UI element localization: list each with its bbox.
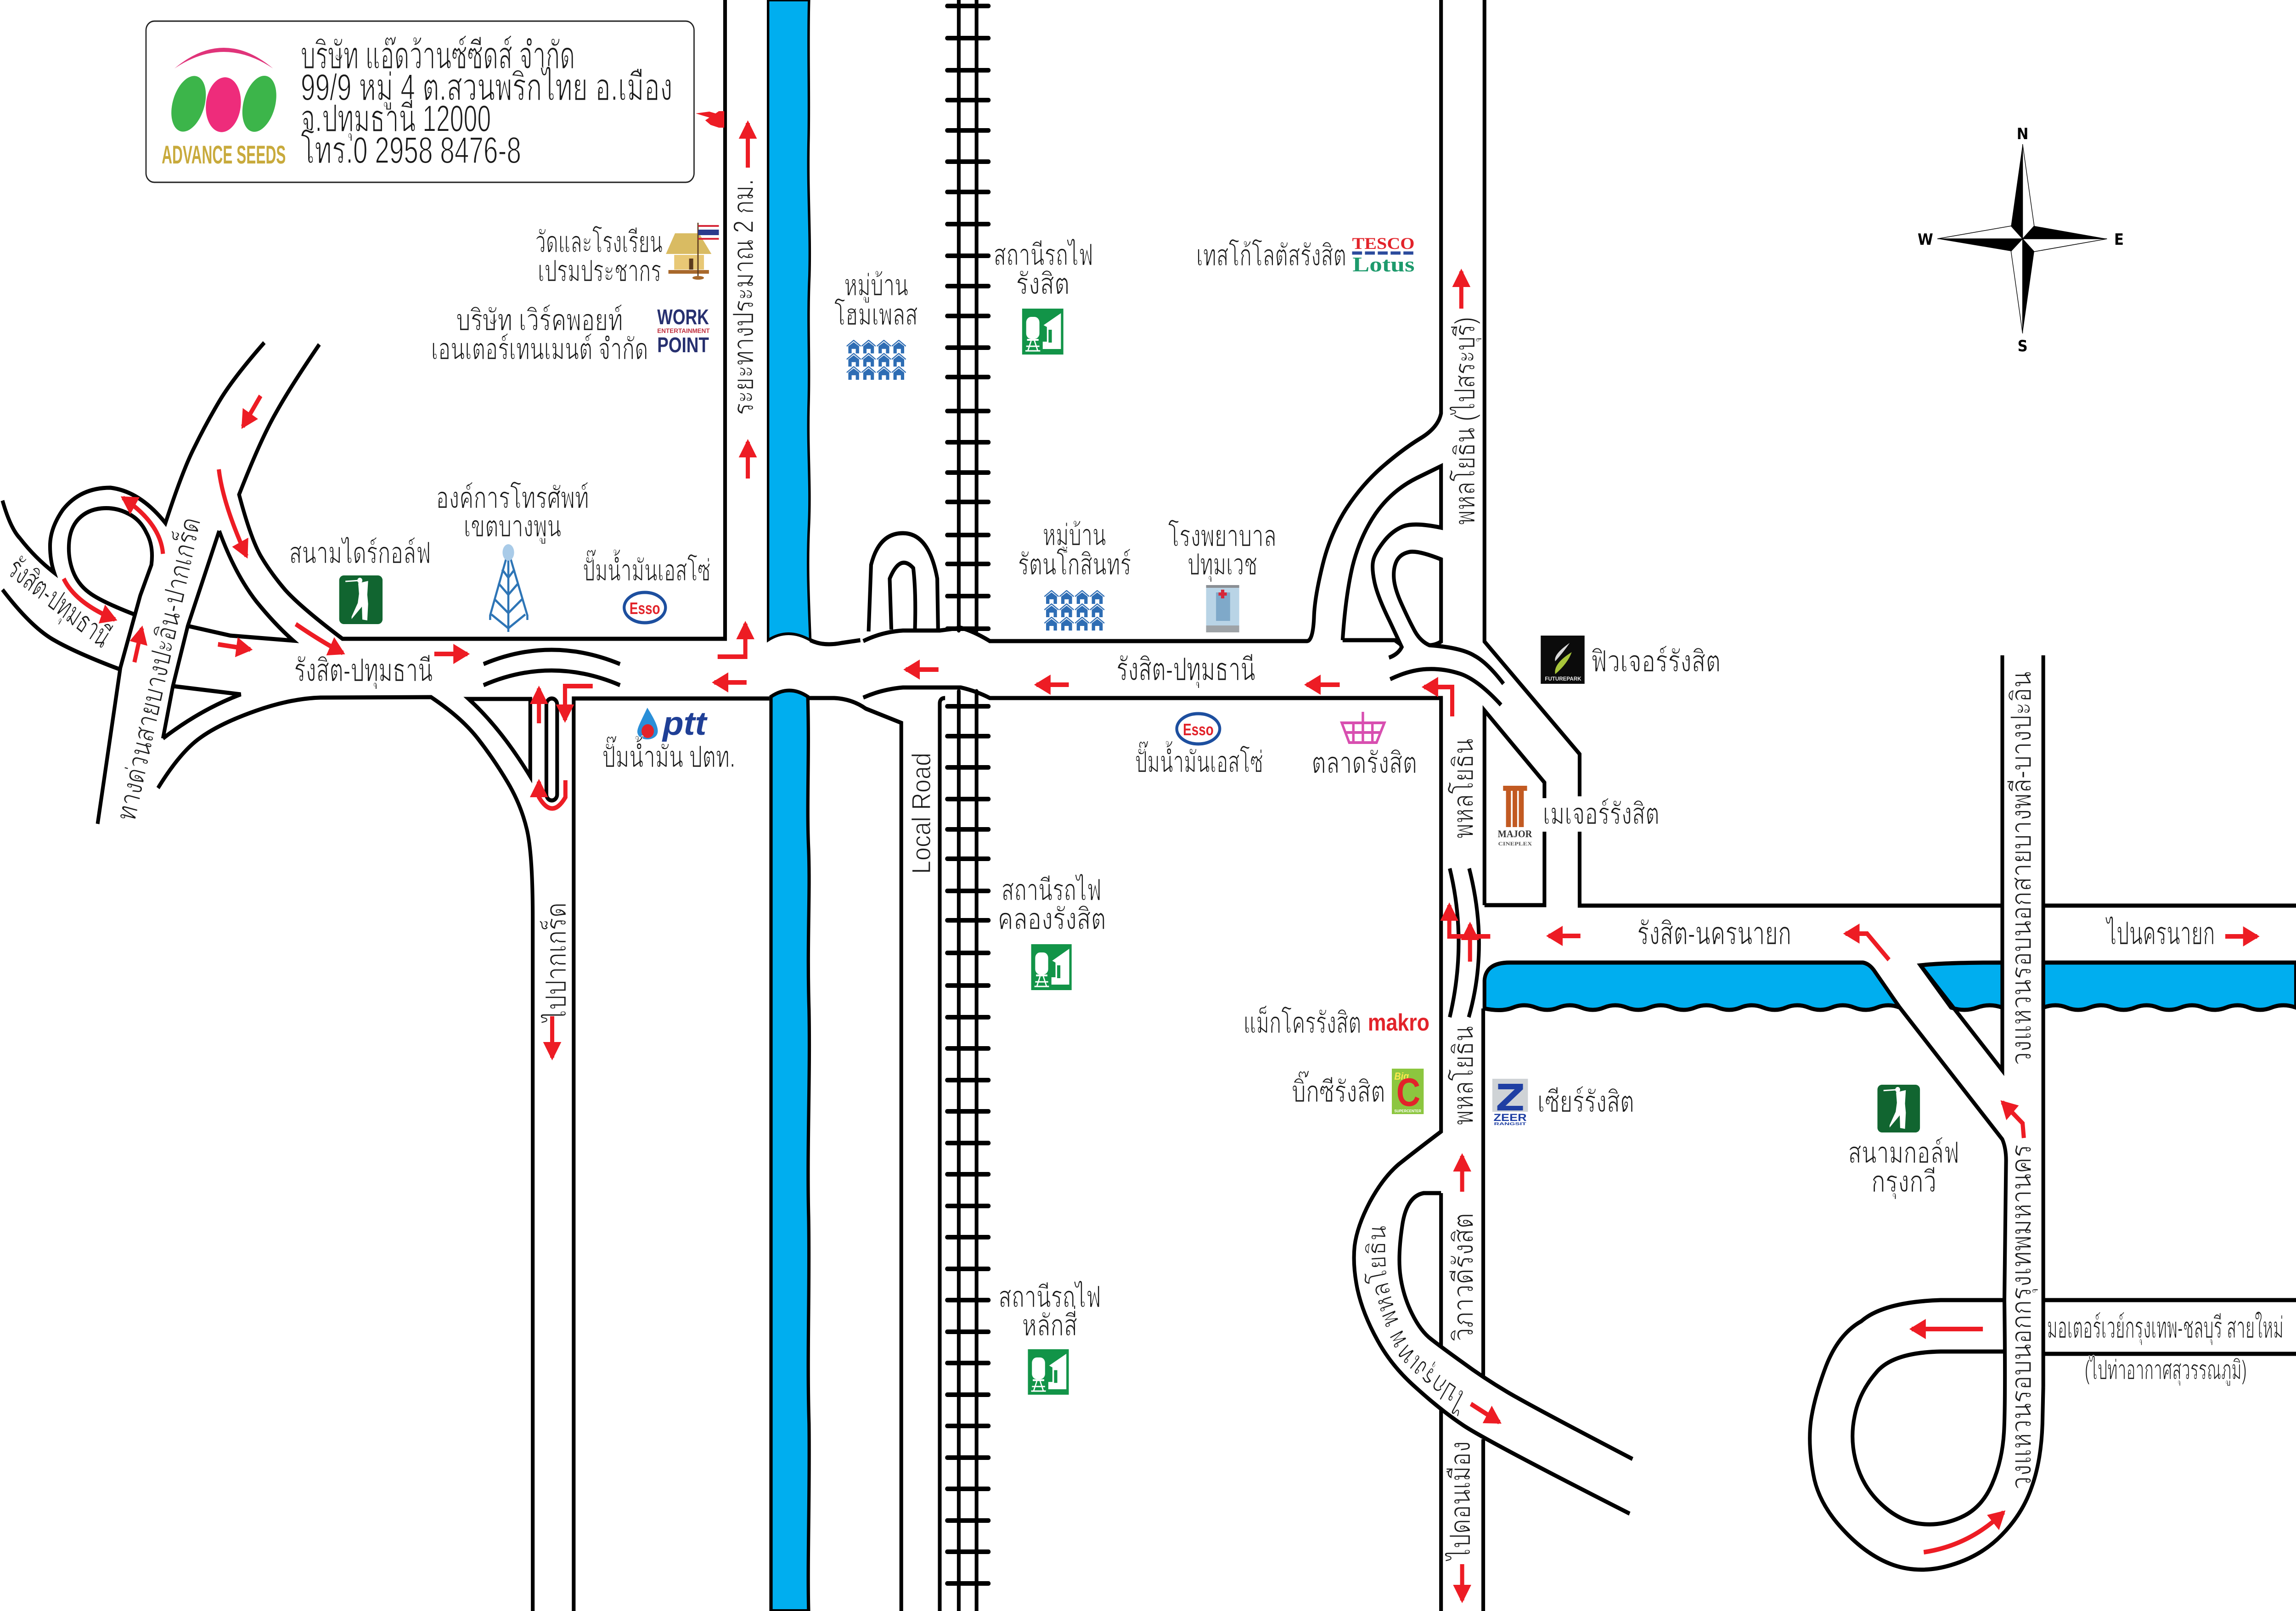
arrow: to Nakhon Nayok [2225, 934, 2257, 939]
arrow: north branch south [243, 396, 260, 427]
landmark: Krungkavee golf [1848, 1085, 1959, 1200]
label: Workpoint line 2: เอนเตอร์เทนเมนต์ จำกัด [431, 332, 648, 366]
logo: makro: makro [1368, 1009, 1429, 1036]
label: Rangsit-Nakhon Nayok: รังสิต-นครนายก [1637, 916, 1791, 951]
road: Pak Kret east edge [574, 698, 769, 1611]
landmark: Makro [1244, 1006, 1429, 1039]
label: Rangsit-Pathum Thani centre: รังสิต-ปทุมธานี [1116, 652, 1255, 689]
landmark: Esso north [583, 549, 710, 623]
phone: โทร.0 2958 8476-8 [301, 129, 521, 171]
landmark: Future Park [1541, 636, 1721, 684]
road: Phahonyothin north east edge and Future Park diagonal [1485, 0, 1580, 796]
icon: tower [490, 544, 527, 632]
arrow: main road west 1 [906, 667, 939, 672]
road: Vibhavadi east edge [1481, 1008, 1486, 1378]
road: rail side road [940, 698, 945, 1611]
label: temple line 1: วัดและโรงเรียน [535, 225, 663, 259]
road: ring road west edge north [1920, 655, 2002, 1070]
road: lower main road near canal [808, 698, 901, 1611]
label: Tesco: เทสโก้โลตัสรังสิต [1196, 239, 1346, 272]
logo: TESCO: TESCO [1352, 234, 1415, 253]
arrow: Phahonyothin north [1468, 924, 1472, 962]
arrow: median U-turn [539, 780, 565, 808]
label: golf 2: กรุงกวี [1871, 1165, 1936, 1200]
road: overpass curves at Rangsit-Nakhon Nayok [1450, 868, 1458, 1017]
arrow: junction elbow [1424, 687, 1452, 716]
arrow: west road east [218, 644, 250, 649]
icon: temple [666, 223, 719, 280]
label: distance along soi: ระยะทางประมาณ 2 กม. [727, 179, 759, 415]
road: motorway south edge [2043, 1352, 2296, 1356]
landmark: telephone organization [436, 481, 589, 632]
road: U-turn outer [869, 533, 938, 631]
compass: black points [1937, 144, 2107, 333]
icon: PTT flame [642, 724, 654, 738]
railway: lower section [947, 691, 989, 1611]
road: upper traffic island [188, 531, 293, 641]
icon: train [1022, 309, 1064, 355]
landmark: Zeer Rangsit [1492, 1079, 1634, 1126]
landmark: Major Cineplex [1498, 786, 1660, 847]
label: Phahonyothin to Saraburi: พหลโยธิน (ไปสระบุรี) [1449, 317, 1482, 525]
icon: location pointer hand [696, 111, 724, 128]
icon: golfer [1877, 1085, 1920, 1132]
arrow: to Pak Kret [550, 1016, 554, 1058]
icon: train [1031, 944, 1072, 990]
canal: horizontal between ramps [1920, 963, 2002, 1010]
compass: N: N [2017, 124, 2028, 143]
icon: Big C: C [1396, 1070, 1420, 1115]
label: ring road south section: วงแหวนรอบนอกกรุงเทพมหานคร [2005, 1144, 2039, 1490]
arrow: loop bottom [64, 579, 115, 620]
arrow: expressway north [135, 628, 142, 662]
label: market: ตลาดรังสิต [1311, 746, 1417, 779]
arrow: Vibhavadi north [1460, 1156, 1464, 1192]
arrow: main road west near soi [715, 680, 747, 685]
logo: center seed [203, 75, 244, 135]
landmark: Esso south [1135, 714, 1263, 778]
label: to Don Mueang: ไปดอนเมือง [1444, 1441, 1476, 1562]
logo: ptt: ptt [662, 705, 708, 742]
road: flyover arc upper [1429, 645, 1503, 684]
canal: horizontal west of interchange [1485, 963, 1900, 1010]
icon: Major: MAJOR [1498, 828, 1532, 839]
road: north branch west edge and cloverleaf [2, 343, 264, 573]
label: station 2: คลองรังสิต [998, 902, 1106, 935]
icon: Future Park [1541, 636, 1585, 684]
info box frame [146, 21, 694, 182]
label: ring road north section: วงแหวนรอบนอกสายบางพลี-บางปะอิน [2005, 671, 2037, 1065]
label: Rattanakosin 1: หมู่บ้าน [1043, 518, 1106, 553]
label: Makro: แม็กโครรังสิต [1244, 1006, 1361, 1039]
landmark: Rangsit market [1311, 712, 1417, 779]
road: Major block lower [1485, 832, 1544, 905]
label: hospital 1: โรงพยาบาล [1168, 519, 1277, 552]
road: interchange inner island [1394, 552, 1441, 645]
label: curved Phahonyothin ramp: ไปกรุงเทพ พหลโยธิน [1362, 1224, 1472, 1418]
icon: Esso oval [1177, 714, 1220, 744]
logo: right seed [236, 71, 282, 137]
arrow: elbow onto flyover [1449, 905, 1490, 936]
label: driving range: สนามไดร์กอล์ฟ [289, 536, 431, 569]
road: diagonal ramp west edge [1900, 1008, 2006, 1300]
icon: Big C: SUPERCENTER [1394, 1109, 1421, 1113]
road: Nakhon Nayok north edge [2043, 904, 2296, 907]
arrow: median elbow [565, 686, 593, 720]
road: north branch east edge to main road [239, 0, 725, 639]
arrow: to Don Mueang [1460, 1564, 1464, 1600]
label: Home Place 2: โฮมเพลส [834, 298, 918, 331]
road: main road south edge and Phahonyothin west edge [863, 687, 1630, 1514]
arrow: main road west 3 [1306, 682, 1339, 687]
canal: horizontal east [2043, 963, 2296, 1010]
label: Vibhavadi Rangsit: วิภาวดีรังสิต [1447, 1213, 1479, 1341]
arrow: main road west 2 [1036, 682, 1069, 687]
icon: PTT drop [637, 708, 658, 739]
label: west Rangsit-Pathum Thani: รังสิต-ปทุมธานี [1, 550, 117, 656]
road: overpass curve east [1469, 868, 1479, 1017]
landmark: Home Place village [834, 269, 918, 380]
icon: Esso wordmark: Esso [1183, 721, 1214, 739]
landmark: Big C [1292, 1069, 1424, 1115]
road: motorway north edge [2043, 1298, 2296, 1302]
label: TOT line 2: เขตบางพูน [464, 510, 561, 544]
logo: ENTERTAINMENT: ENTERTAINMENT [657, 327, 710, 334]
road: expressway east edge [163, 531, 219, 738]
label: station 2: หลักสี่ [1022, 1305, 1077, 1342]
icon: Zeer: ZEER [1494, 1112, 1527, 1123]
road: Vibhavadi west edge [1439, 1193, 1443, 1347]
label: PTT: ปั๊มน้ำมัน ปตท. [602, 736, 736, 773]
landmark: Rattanakosin village [1018, 518, 1131, 631]
compass: S: S [2018, 337, 2028, 355]
arrow: merge curve [296, 624, 343, 653]
label: Rangsit-Pathum Thani west: รังสิต-ปทุมธานี [294, 653, 433, 690]
road: Don Mueang east edge [1481, 1439, 1486, 1611]
compass: E: E [2114, 230, 2124, 248]
road: junction island [469, 699, 530, 777]
icon: train [1028, 1349, 1069, 1395]
label: Esso: ปั๊มน้ำมันเอสโซ่ [583, 549, 710, 587]
logo: WORK: WORK [657, 305, 709, 329]
arrow: main road east [434, 652, 467, 656]
landmark: Tesco Lotus [1196, 234, 1415, 276]
label: Major: เมเจอร์รังสิต [1543, 797, 1660, 830]
landmark: temple and school [535, 223, 719, 287]
road: interchange ramp base [1343, 640, 1401, 644]
road: Major block upper [1485, 710, 1544, 905]
icon: Major: CINEPLEX [1498, 841, 1532, 847]
road: lower interchange inner curve [1399, 1193, 1632, 1459]
icon: Esso oval [624, 592, 665, 623]
label: Zeer: เซียร์รังสิต [1537, 1085, 1634, 1118]
landmark: PTT [602, 705, 736, 773]
landmark: Khlong Rangsit station [998, 873, 1106, 990]
road: lower traffic island [163, 686, 241, 738]
arrow: loop curve [1924, 1512, 2003, 1552]
compass: white points [1937, 144, 2107, 333]
logo: dashes [1352, 252, 1415, 254]
label: station 1: สถานีรถไฟ [994, 238, 1093, 271]
label: Home Place 1: หมู่บ้าน [844, 269, 908, 303]
icon: hospital [1206, 585, 1239, 632]
road: flyover arc lower [1390, 669, 1501, 705]
label: Phahonyothin lower interchange: พหลโยธิน [1447, 738, 1479, 839]
road: narrow median [546, 698, 557, 800]
road: main road north edge east of canal [810, 640, 861, 644]
road: loop inner [1852, 1300, 2005, 1524]
arrow: motorway loop west [1912, 1327, 1983, 1331]
icon: Major [1498, 786, 1532, 847]
arrow: loop top [123, 498, 163, 554]
icon: houses [1044, 591, 1104, 631]
company name: บริษัท แอ๊ดว้านซ์ซีดส์ จำกัด [301, 34, 575, 77]
label: Phahonyothin mid: พหลโยธิน [1447, 1026, 1479, 1125]
road: U-turn inner [889, 563, 915, 631]
road: interchange quarter ramp [1343, 466, 1441, 658]
arrow: ramp south-east [1471, 1404, 1499, 1422]
road: ring road east edge [2041, 655, 2045, 1387]
landmark: Rangsit station [994, 238, 1093, 355]
label: station 2: รังสิต [1016, 267, 1069, 300]
label: to Pak Kret: ไปปากเกร็ด [540, 902, 572, 1024]
label: TOT line 1: องค์การโทรศัพท์ [436, 481, 589, 514]
road: main road north edge to Phahonyothin [863, 0, 1441, 641]
arrow: north branch curve [219, 469, 247, 556]
logo: Lotus: Lotus [1352, 253, 1415, 276]
panel: company info box [146, 21, 694, 182]
label: Workpoint line 1: บริษัท เวิร์คพอยท์ [456, 304, 623, 337]
road: loop outer [1810, 1300, 2043, 1570]
label: Big C: บิ๊กซีรังสิต [1292, 1070, 1385, 1108]
label: Future Park: ฟิวเจอร์รังสิต [1591, 645, 1721, 678]
road: overpass arc upper [484, 650, 620, 664]
label: Local Road: Local Road [906, 753, 936, 874]
label: golf 1: สนามกอล์ฟ [1848, 1136, 1959, 1169]
logo: POINT: POINT [657, 333, 709, 357]
icon: basket [1342, 712, 1384, 743]
label: Rattanakosin 2: รัตนโกสินทร์ [1018, 548, 1131, 581]
road: Don Mueang west edge [1439, 1410, 1443, 1611]
arrow: turn into soi [718, 624, 745, 657]
road: teardrop loop and expressway [69, 508, 152, 824]
road: east edge to ring road [1580, 832, 2002, 906]
address line 1: 99/9 หมู่ 4 ต.สวนพริกไทย อ.เมือง [301, 66, 673, 110]
landmark: driving range [289, 536, 431, 624]
logo: left seed [165, 71, 212, 137]
logo wordmark: ADVANCE SEEDS [162, 141, 286, 169]
canal: upper vertical [768, 0, 810, 640]
compass rose [1918, 124, 2124, 355]
icon: Zeer [1492, 1079, 1528, 1126]
arrow: north on soi [746, 123, 750, 168]
address line 2: จ.ปทุมธานี 12000 [301, 97, 491, 141]
landmark: Pathumwej hospital [1168, 519, 1277, 632]
arrow: ring road ramp [2002, 1102, 2024, 1138]
landmark: Lak Si station [998, 1280, 1101, 1395]
compass: W: W [1918, 230, 1933, 248]
label: Esso: ปั๊มน้ำมันเอสโซ่ [1135, 741, 1263, 778]
label: hospital 2: ปทุมเวช [1187, 548, 1257, 582]
icon: Esso wordmark: Esso [630, 599, 660, 618]
railway: upper section [947, 0, 989, 631]
label: station 1: สถานีรถไฟ [998, 1280, 1101, 1313]
label: expressway: ทางด่วนสายบางปะอิน-ปากเกร็ด [109, 513, 207, 824]
arrow: north on soi lower [746, 442, 750, 479]
road: south curve to Pak Kret [158, 697, 533, 1611]
canal: lower vertical [771, 691, 809, 1611]
arrow: median up [537, 688, 541, 723]
label: station 1: สถานีรถไฟ [1002, 873, 1102, 907]
road: overpass arc lower [484, 670, 620, 685]
icon: Zeer: RANGSIT [1494, 1122, 1526, 1126]
arrow: Saraburi north [1459, 271, 1463, 309]
arrow: Nakhon Nayok road west [1548, 934, 1581, 938]
label: to Nakhon Nayok: ไปนครนายก [2105, 916, 2215, 951]
road: west road lower edge [2, 590, 120, 670]
landmark: Workpoint [431, 304, 710, 366]
logo: arc [174, 48, 273, 68]
arrow: bent west [1846, 934, 1889, 960]
icon: golfer [339, 575, 383, 624]
icon: Future Park: FUTUREPARK [1545, 676, 1581, 682]
label: temple line 2: เปรมประชากร [538, 254, 661, 287]
icon: Big C: Big [1394, 1071, 1409, 1082]
icon: houses [847, 340, 906, 380]
